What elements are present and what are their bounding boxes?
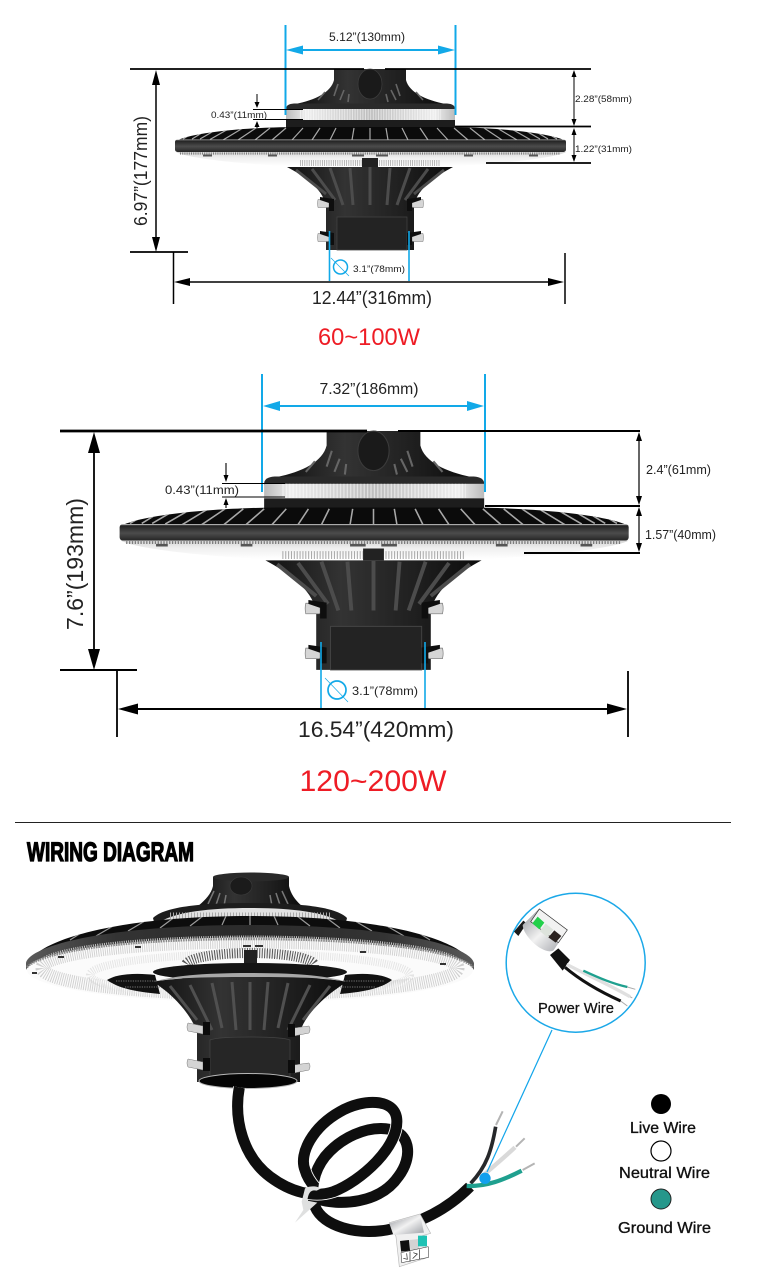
legend: wire colours	[618, 1094, 711, 1237]
right height dimensions: 1.57”(40mm)	[645, 528, 716, 542]
wires	[467, 1111, 535, 1186]
glass height dimension 0.43	[211, 94, 303, 128]
right height dimensions	[636, 432, 716, 552]
glass height dimension 0.43: 0.43”(11mm)	[211, 110, 267, 121]
glass height dimension 0.43	[165, 463, 285, 508]
cyan width dimension 7.32	[262, 374, 485, 492]
heading: WIRING DIAGRAM	[27, 837, 194, 867]
cyan width dimension 5.12	[286, 25, 456, 115]
black reference lines	[130, 69, 591, 304]
power label 60~100W: 60~100W	[318, 324, 420, 351]
zip tie	[295, 1186, 321, 1223]
lamp perspective view	[26, 872, 474, 1088]
height dimension 6.97: 6.97”(177mm)	[131, 116, 151, 226]
neck diameter 3.1: 3.1”(78mm)	[352, 684, 418, 698]
power label 120~200W: 120~200W	[300, 765, 447, 798]
panel: 60~100W dimension drawing	[130, 25, 632, 351]
width dimension 16.54	[118, 704, 627, 742]
neck diameter 3.1	[330, 231, 409, 281]
glass height dimension 0.43: 0.43”(11mm)	[165, 483, 239, 497]
height dimension 7.6	[62, 432, 100, 670]
right height dimensions	[572, 70, 632, 162]
black cable	[238, 1087, 470, 1231]
live wire: Live Wire	[630, 1120, 696, 1137]
callout: power wire: Power Wire	[538, 1001, 614, 1017]
right height dimensions: 1.22”(31mm)	[575, 144, 632, 155]
lamp side view 120~200W	[120, 431, 629, 670]
panel: 120~200W dimension drawing	[60, 374, 716, 798]
neutral wire: Neutral Wire	[619, 1165, 710, 1182]
height dimension 6.97	[131, 70, 160, 252]
right height dimensions: 2.4”(61mm)	[646, 463, 711, 477]
height dimension 7.6: 7.6”(193mm)	[62, 498, 88, 630]
live wire	[630, 1094, 696, 1137]
width dimension 16.54: 16.54”(420mm)	[298, 717, 454, 742]
black reference lines	[60, 431, 640, 737]
neck diameter 3.1: 3.1”(78mm)	[353, 264, 405, 275]
cable tag	[389, 1214, 431, 1267]
ground wire: Ground Wire	[618, 1220, 711, 1237]
callout: power wire	[506, 893, 645, 1032]
cyan width dimension 5.12: 5.12”(130mm)	[329, 32, 405, 44]
blue leader line	[487, 1030, 552, 1172]
neck diameter 3.1	[321, 642, 425, 708]
ground wire	[618, 1189, 711, 1237]
cyan width dimension 7.32: 7.32”(186mm)	[320, 381, 418, 398]
width dimension 12.44: 12.44”(316mm)	[312, 288, 432, 308]
blue pointer dot	[479, 1173, 491, 1184]
panel: wiring diagram	[26, 837, 711, 1267]
power cable with wires and tag	[238, 1087, 535, 1267]
connector detail	[514, 908, 635, 1006]
width dimension 12.44	[174, 278, 564, 308]
right height dimensions: 2.28”(58mm)	[575, 94, 632, 105]
neutral wire	[619, 1141, 710, 1182]
lamp side view 60~100W	[175, 69, 566, 250]
